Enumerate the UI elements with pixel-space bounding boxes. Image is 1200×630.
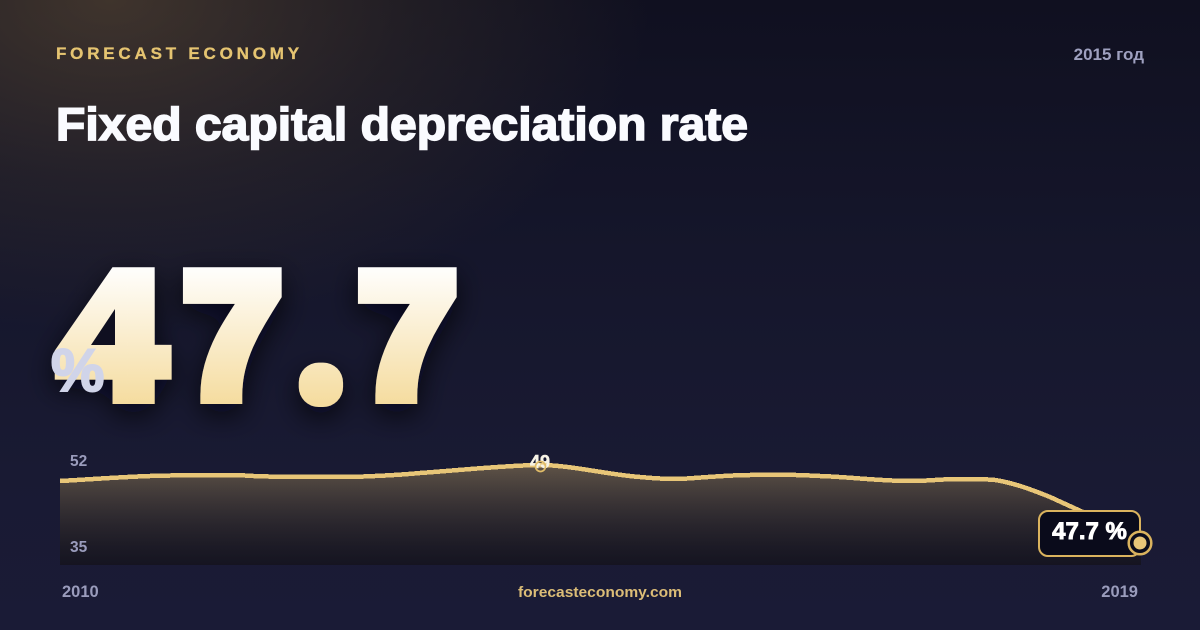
peak marker [536, 462, 546, 472]
axis label 35: 35 [70, 539, 88, 556]
x-axis end 2019: 2019 [1101, 583, 1138, 601]
line [60, 465, 1085, 513]
big number 47.7: 4 [61, 238, 164, 432]
area fill [60, 465, 1141, 565]
area gradient overlay [60, 465, 1141, 565]
counter of digit 4 [91, 309, 115, 345]
source: forecasteconomy.com: forecasteconomy.com [518, 584, 682, 601]
callout: 47.7 %: 47.7 % [1052, 518, 1127, 545]
big number 47.7 [61, 238, 456, 432]
big number 47.7: 7 [359, 238, 456, 432]
area chart [60, 465, 1141, 565]
eyebrow: FORECAST ECONOMY: FORECAST ECONOMY [56, 44, 303, 63]
title: Fixed capital depreciation rate [56, 98, 748, 150]
big number 47.7: . [317, 361, 325, 394]
end marker [1129, 532, 1151, 554]
axis label 52: 52 [70, 453, 87, 470]
x-axis start 2010: 2010 [62, 583, 99, 601]
peak value 49: 49 [530, 452, 550, 472]
callout: 47.7 % [1039, 511, 1140, 556]
big number 47.7: 7 [184, 238, 281, 432]
year label: 2015 год [1074, 45, 1144, 64]
percent sign: % [51, 337, 104, 404]
area shading [60, 465, 1141, 565]
